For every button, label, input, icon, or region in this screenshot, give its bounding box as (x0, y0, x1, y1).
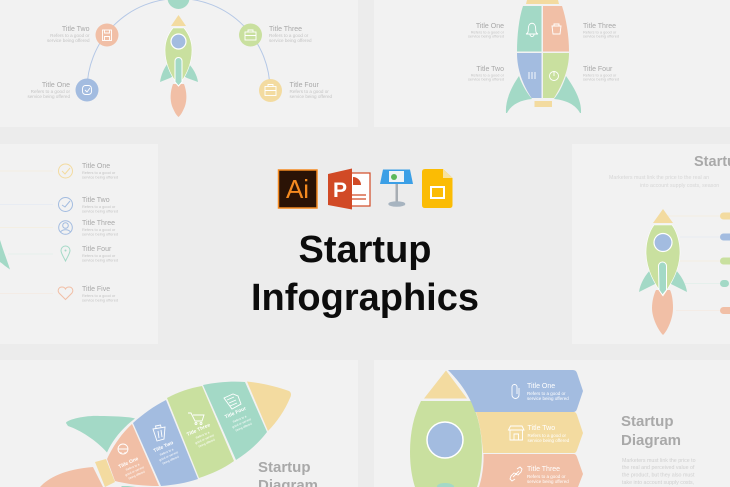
label: title four: Refers to a good or (583, 72, 617, 78)
label: title three: service being offered (583, 34, 619, 38)
item: title three (59, 220, 118, 236)
quadrant: title three (543, 6, 569, 52)
segment: title one (107, 424, 159, 486)
item: title one: service being offered (82, 174, 118, 180)
quadrant: title one (517, 6, 542, 52)
banner: title one: Title One (527, 383, 555, 390)
banner: title three (479, 454, 583, 487)
segment: title two: being offered (162, 455, 180, 465)
item: title three: Title Three (82, 220, 115, 227)
node: title four: Refers to a good or (290, 89, 329, 94)
item: title four: service being offered (82, 258, 118, 262)
item: title four: Title Four (82, 246, 112, 253)
icon: Illustrator (278, 170, 317, 208)
title (251, 229, 479, 319)
item: title three: service being offered (82, 232, 118, 236)
label: title four (583, 66, 619, 82)
app icons row (278, 168, 452, 210)
item: title two: service being offered (82, 208, 118, 214)
item: title one: Title One (82, 163, 110, 170)
item: title three: Refers to a good or (82, 227, 116, 232)
left fin (506, 76, 532, 113)
heading (258, 459, 318, 487)
upper fin (66, 416, 135, 452)
item: title four: Refers to a good or (82, 253, 116, 258)
icon: Google Slides (422, 169, 452, 208)
segment: title three: Title Three (186, 422, 212, 438)
flame (40, 467, 103, 487)
item: title two: Refers to a good or (82, 204, 116, 209)
rocket bottom nozzle (534, 101, 552, 107)
label: title one: Title One (476, 23, 504, 30)
segment: title one: being offered (128, 470, 146, 480)
node: title four: service being offered (290, 94, 333, 99)
node: title three: Refers to a good or (269, 33, 309, 38)
node: title three: service being offered (269, 38, 312, 43)
segment: title three: being offered (198, 438, 216, 448)
segment: title one: good or service (124, 465, 145, 477)
icon: PowerPoint: P (333, 179, 347, 202)
node: title two: service being offered (47, 38, 90, 43)
segment: title two (133, 400, 198, 486)
node: title one (27, 78, 98, 102)
segment: title four: being offered (235, 422, 253, 432)
icon: Keynote (380, 170, 413, 207)
arc connector (87, 0, 270, 90)
heading: Startup (258, 459, 310, 476)
title: Startup (298, 229, 432, 271)
segment: title two: good or service (158, 450, 179, 462)
node: title two: Refers to a good or (50, 33, 90, 38)
banner: title one: Refers to a good or (527, 391, 566, 396)
label: title one: service being offered (468, 34, 504, 38)
rocket exhaust bar (437, 483, 454, 487)
panel: four-quadrant rocket (374, 0, 730, 127)
item: title two (58, 197, 118, 214)
rocket illustration (160, 15, 198, 117)
label: title three (583, 23, 619, 38)
quadrant: title four (543, 53, 569, 98)
quadrant: title two (517, 53, 542, 98)
banner: title two: Refers to a good or (528, 433, 567, 438)
rocket body (410, 401, 482, 487)
segment: title four: Title Four (224, 406, 247, 420)
panel: rocket with arrow banners (374, 360, 730, 487)
item: title one (58, 163, 118, 180)
description: take into account supply costs, (622, 480, 694, 486)
icon: PowerPoint (328, 168, 370, 210)
description (622, 458, 696, 486)
connector lines (668, 216, 720, 310)
label: title two: service being offered (468, 76, 504, 82)
title: Infographics (251, 277, 479, 319)
rocket top cap (526, 0, 559, 4)
label: title two: Refers to a good or (471, 72, 505, 78)
segment: title three (167, 386, 234, 478)
description: into account supply costs, season (640, 183, 719, 189)
item: title five (58, 286, 118, 302)
banner: title two (476, 412, 583, 453)
lower fin fragment (121, 486, 136, 487)
node: title one: service being offered (27, 94, 70, 99)
heading: Startup (621, 413, 674, 430)
node: title three: Title Three (269, 26, 302, 33)
right fin (554, 76, 581, 113)
label: title two (468, 66, 505, 82)
label: title two: Title Two (476, 66, 504, 73)
node: title one: Title One (42, 82, 70, 89)
segment: title four: good or service (231, 417, 252, 429)
rocket fin fragment (0, 240, 10, 270)
item: title five: Refers to a good or (82, 293, 116, 298)
segment: title one: Title One (118, 456, 140, 470)
item: title four (61, 246, 118, 262)
item: title two: Title Two (82, 197, 110, 204)
description: the real and perceived value of (622, 465, 695, 471)
segment: title three: good or service (194, 433, 215, 445)
item: title one: Refers to a good or (82, 170, 116, 175)
label: title three: Title Three (583, 23, 616, 30)
node: title two (47, 24, 118, 46)
banner: title two: Title Two (528, 425, 555, 432)
description (609, 175, 719, 189)
segment: title one: Refers to a (125, 462, 140, 472)
description: Marketers must link the price to the real an (609, 175, 709, 181)
segment: nose tip (247, 382, 291, 431)
rocket illustration (639, 209, 687, 335)
label: title four: service being offered (583, 76, 619, 82)
item: title five: Title Five (82, 286, 110, 293)
rocket window (427, 422, 463, 458)
segment: title two: Refers to a (159, 447, 174, 457)
node: title four: Title Four (290, 82, 319, 89)
node: title two: Title Two (62, 26, 90, 33)
label: title three: Refers to a good or (583, 30, 617, 34)
segment: title four: Refers to a (232, 414, 247, 424)
node: title one: Refers to a good or (31, 89, 70, 94)
node: title three (239, 24, 312, 46)
label: title one: Refers to a good or (471, 30, 505, 34)
banner: title one: service being offered (527, 396, 569, 401)
node: title four (259, 79, 333, 102)
banner: title three: Title Three (527, 466, 560, 473)
heading (621, 413, 681, 449)
top node (168, 0, 190, 9)
description: the product, but they also must (622, 472, 695, 478)
heading: Diagram (621, 432, 681, 449)
item: title five: service being offered (82, 298, 118, 302)
legend pills (720, 212, 730, 314)
rocket nose (424, 370, 467, 398)
label: title four: Title Four (583, 66, 613, 73)
neck (95, 459, 115, 487)
segment: title two: Title Two (153, 440, 175, 454)
segment: title four (203, 382, 267, 460)
banner: title three: service being offered (527, 479, 569, 484)
panel: icon list (0, 144, 158, 344)
panel: diagonal rocket (0, 360, 358, 487)
icon: Illustrator: Ai (286, 174, 309, 204)
description: Marketers must link the price to (622, 458, 696, 464)
segment: title three: Refers to a (195, 430, 210, 440)
banner: title one (448, 370, 583, 412)
panel: rocket with pill legend (572, 144, 730, 344)
banner: title three: Refers to a good or (527, 474, 566, 479)
banner: title two: service being offered (528, 438, 570, 443)
panel: arc timeline rocket (0, 0, 358, 127)
connector lines (0, 171, 53, 294)
label: title one (468, 23, 505, 38)
